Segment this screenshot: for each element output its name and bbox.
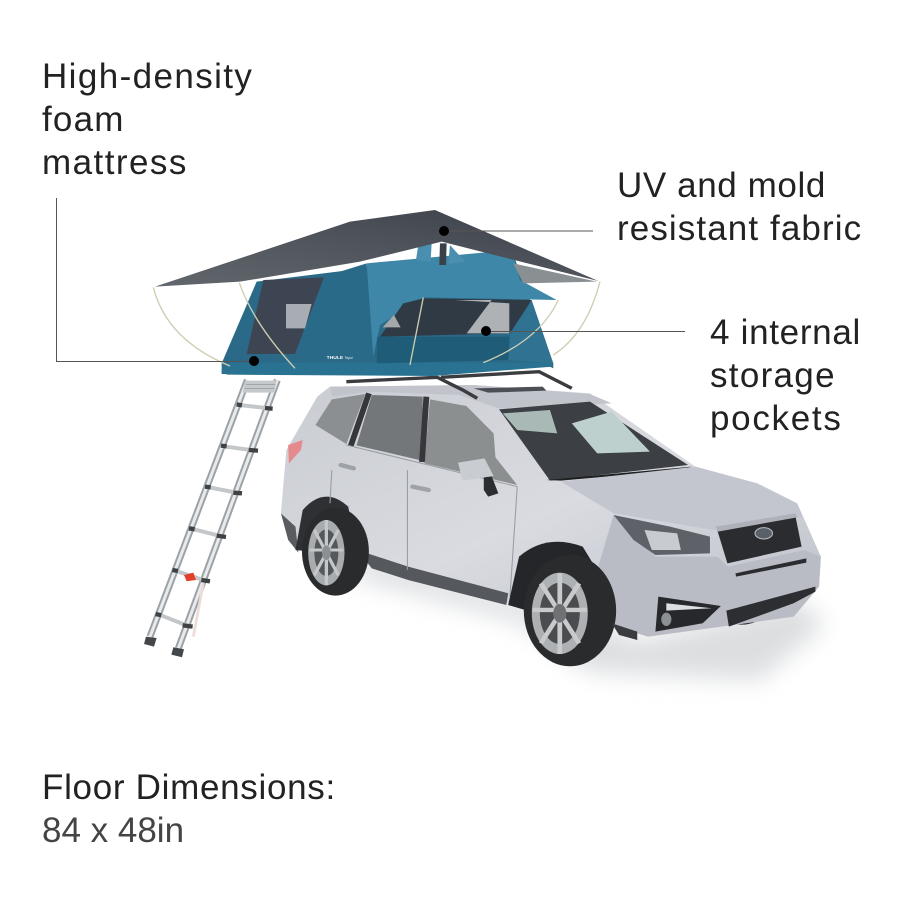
tail light	[288, 440, 303, 463]
floor dimensions: 84 x 48in	[42, 811, 184, 850]
headlight	[614, 515, 710, 555]
brand label: THULE Tepui	[327, 355, 353, 361]
leader: foam mattress	[56, 198, 259, 366]
fog light surround	[655, 597, 721, 632]
far front wheel	[732, 613, 768, 625]
left side window	[247, 277, 324, 354]
callout: foam mattress: mattress	[42, 143, 188, 182]
side skirt	[357, 550, 508, 605]
ladder	[144, 380, 277, 657]
vent flaps	[416, 243, 432, 262]
lower intake	[726, 587, 815, 627]
door seams	[330, 445, 517, 597]
callout: storage pockets: pockets	[710, 399, 843, 438]
roof rails	[346, 372, 572, 398]
bumper	[597, 515, 821, 637]
rear bumper lower	[281, 513, 298, 553]
floor dimensions: Floor Dimensions:	[42, 768, 336, 807]
rain fly	[155, 210, 598, 287]
callout: fabric: UV and mold	[617, 166, 826, 205]
callout: storage pockets: storage	[710, 356, 836, 395]
car shadow	[345, 555, 825, 680]
front wheel arch	[508, 542, 605, 633]
window pillars	[351, 393, 426, 462]
tent	[153, 210, 600, 376]
rear door window	[357, 395, 423, 461]
front window	[380, 298, 532, 340]
callout: storage pockets	[710, 313, 861, 438]
leader: fabric	[439, 226, 593, 236]
hood	[561, 467, 803, 530]
SUV	[281, 372, 821, 666]
rear quarter window	[315, 394, 365, 444]
side panel	[297, 263, 373, 363]
lower front panel	[377, 337, 511, 363]
car body	[281, 385, 821, 637]
front door window	[425, 399, 517, 485]
roof	[330, 385, 612, 408]
rear wheel arch	[295, 497, 359, 557]
mirror	[484, 477, 498, 497]
bumper vent	[735, 558, 806, 577]
callout: foam mattress: High-density	[42, 57, 253, 96]
sunroof	[474, 387, 546, 393]
base	[222, 363, 553, 376]
door handles	[341, 465, 429, 490]
callout: fabric	[617, 166, 862, 248]
grille	[717, 516, 802, 563]
callout: foam mattress: foam	[42, 100, 125, 139]
front wheel	[524, 555, 616, 666]
front awning	[367, 250, 557, 357]
callout: storage pockets: 4 internal	[710, 313, 861, 352]
floor dimensions	[42, 768, 336, 850]
tent body	[222, 250, 553, 375]
rain fly shadow	[513, 263, 597, 283]
leader: pockets	[481, 326, 685, 336]
front chin	[612, 623, 637, 640]
rear wheel	[302, 508, 369, 596]
right panel	[508, 300, 553, 363]
callout: foam mattress	[42, 57, 253, 182]
guy wires	[153, 282, 600, 368]
windshield	[499, 402, 688, 481]
callout: fabric: resistant fabric	[617, 209, 862, 248]
